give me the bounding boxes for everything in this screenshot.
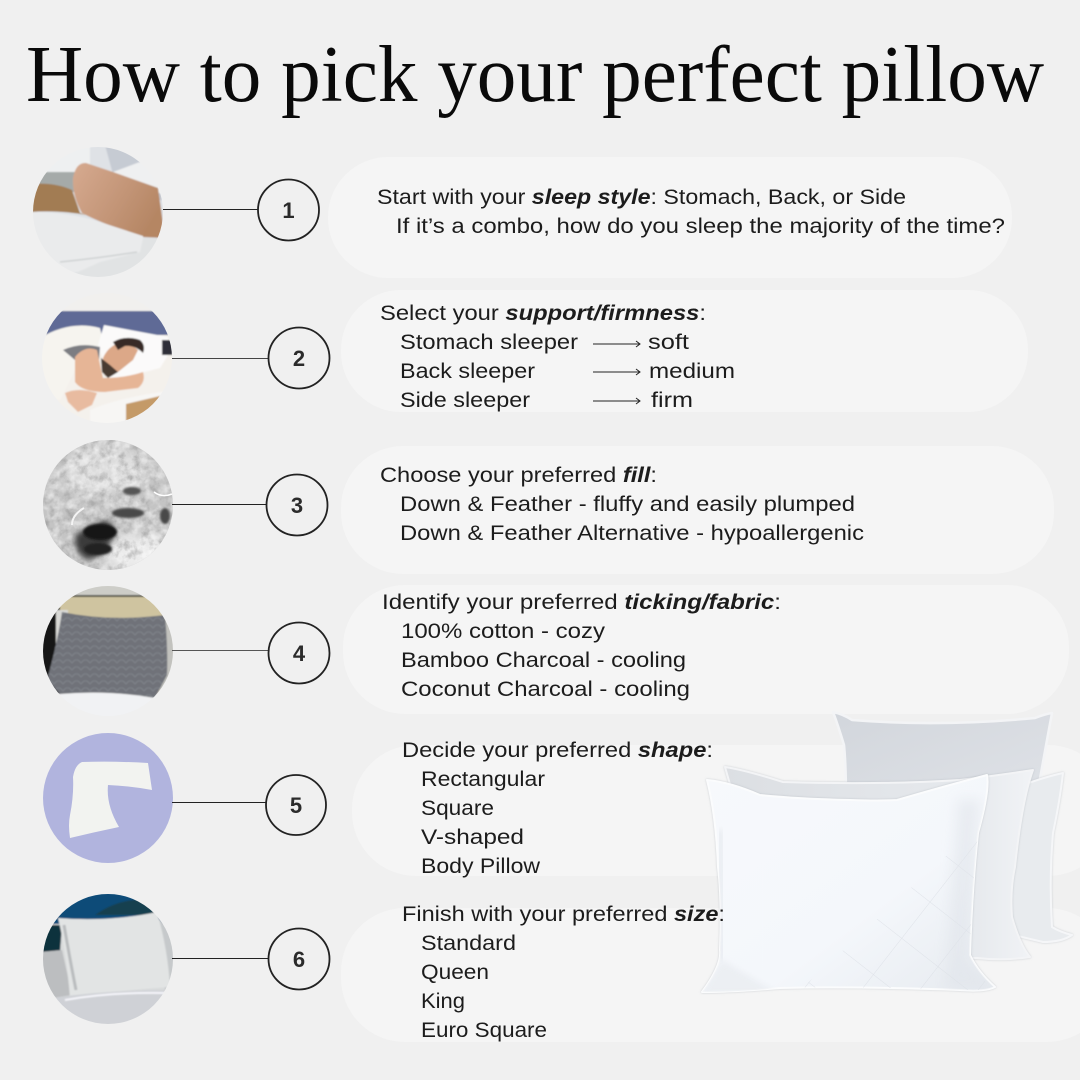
number badge 5	[266, 775, 326, 835]
step 2 text: Side sleeper	[400, 388, 530, 412]
back pillow	[833, 712, 1052, 800]
step 6	[43, 894, 330, 1024]
step 5 text: Square	[421, 796, 494, 820]
number badge 3	[266, 474, 328, 536]
number badge 1	[258, 180, 319, 240]
step 3 text	[380, 463, 864, 545]
photo: gray patterned pillow	[43, 586, 173, 698]
number badge 6: 6	[293, 947, 305, 972]
step 4 text: Coconut Charcoal - cooling	[401, 677, 690, 701]
middle pillow	[725, 767, 1033, 959]
step 2 text: Select your support/firmness :	[380, 301, 706, 325]
photo: white square pillow on bed	[40, 892, 175, 1027]
right side of back pillow	[1005, 773, 1072, 942]
number badge 2: 2	[293, 346, 305, 371]
step 3 text: Down & Feather Alternative - hypoallergenic	[400, 521, 864, 545]
connector line 5	[172, 802, 266, 804]
photo: V-shaped pillow on lavender	[43, 733, 173, 863]
step 4 text: Identify your preferred ticking/fabric :	[382, 590, 781, 614]
step 4	[43, 586, 779, 700]
connector line 3	[172, 504, 266, 506]
step 2 text	[380, 301, 735, 412]
number badge 3: 3	[291, 493, 303, 518]
title: How to pick your perfect pillow	[26, 29, 1044, 119]
step 3 text: Choose your preferred fill:	[380, 463, 657, 487]
step 2	[46, 304, 734, 420]
step 1 text: If it’s a combo, how do you sleep the majority of the time?	[396, 214, 1005, 238]
photo: down feathers	[43, 440, 173, 570]
step 6 text: Euro Square	[421, 1018, 547, 1042]
connector line 1	[163, 208, 258, 210]
number badge 4	[268, 622, 330, 684]
illustration: stack of three white pillows	[700, 712, 1072, 995]
panel: step 3 text background	[341, 446, 1054, 574]
number badge 5: 5	[290, 793, 302, 818]
panel: step 4 text background	[343, 585, 1069, 714]
step 5	[43, 733, 1080, 878]
step 2 text: soft	[648, 330, 689, 354]
panel: step 6 text background	[341, 908, 1080, 1042]
step 2 text: Stomach sleeper	[400, 330, 578, 354]
connector line 4	[172, 650, 268, 652]
number badge 2	[268, 328, 330, 388]
step 1 text: Start with your sleep style : Stomach, Back, or Side	[377, 185, 906, 209]
number badge 1: 1	[282, 198, 295, 223]
step 5 text: Body Pillow	[421, 854, 540, 878]
step 6 text	[402, 902, 725, 1042]
panel: step 5 text background	[352, 745, 1080, 876]
step 3	[43, 440, 864, 570]
connector line 6	[172, 958, 268, 960]
step 6 text: King	[421, 989, 465, 1013]
step 5 text: Decide your preferred shape :	[402, 738, 713, 762]
panel: step 2 text background	[341, 290, 1028, 412]
step 6 text: Finish with your preferred size:	[402, 902, 725, 926]
step 5 text	[402, 738, 713, 878]
step 2 text: firm	[651, 388, 693, 412]
step 4 text	[382, 590, 781, 701]
front pillow	[700, 770, 1000, 995]
step 1	[30, 145, 1012, 280]
arrow: stomach to soft	[593, 341, 640, 347]
connector line 2	[172, 358, 268, 360]
step 5 text: Rectangular	[421, 767, 545, 791]
step 3 text: Down & Feather - fluffy and easily plumped	[400, 492, 855, 516]
step 6 text: Standard	[421, 931, 516, 955]
arrow: back to medium	[593, 369, 640, 375]
step 4 text: 100% cotton - cozy	[401, 619, 605, 643]
photo: man sleeping on his side	[46, 310, 172, 420]
step 6 text: Queen	[421, 960, 489, 984]
arrow: side to firm	[593, 398, 640, 404]
panel: step 1 text background	[328, 157, 1012, 278]
step 2 text: medium	[649, 359, 735, 383]
number badge 4: 4	[293, 641, 306, 666]
step 2 text: Back sleeper	[400, 359, 535, 383]
number badge 6	[268, 928, 330, 990]
step 5 text: V-shaped	[421, 825, 524, 849]
photo: person sleeping on stomach	[30, 145, 165, 280]
step 1 text	[377, 185, 1005, 238]
step 4 text: Bamboo Charcoal - cooling	[401, 648, 686, 672]
